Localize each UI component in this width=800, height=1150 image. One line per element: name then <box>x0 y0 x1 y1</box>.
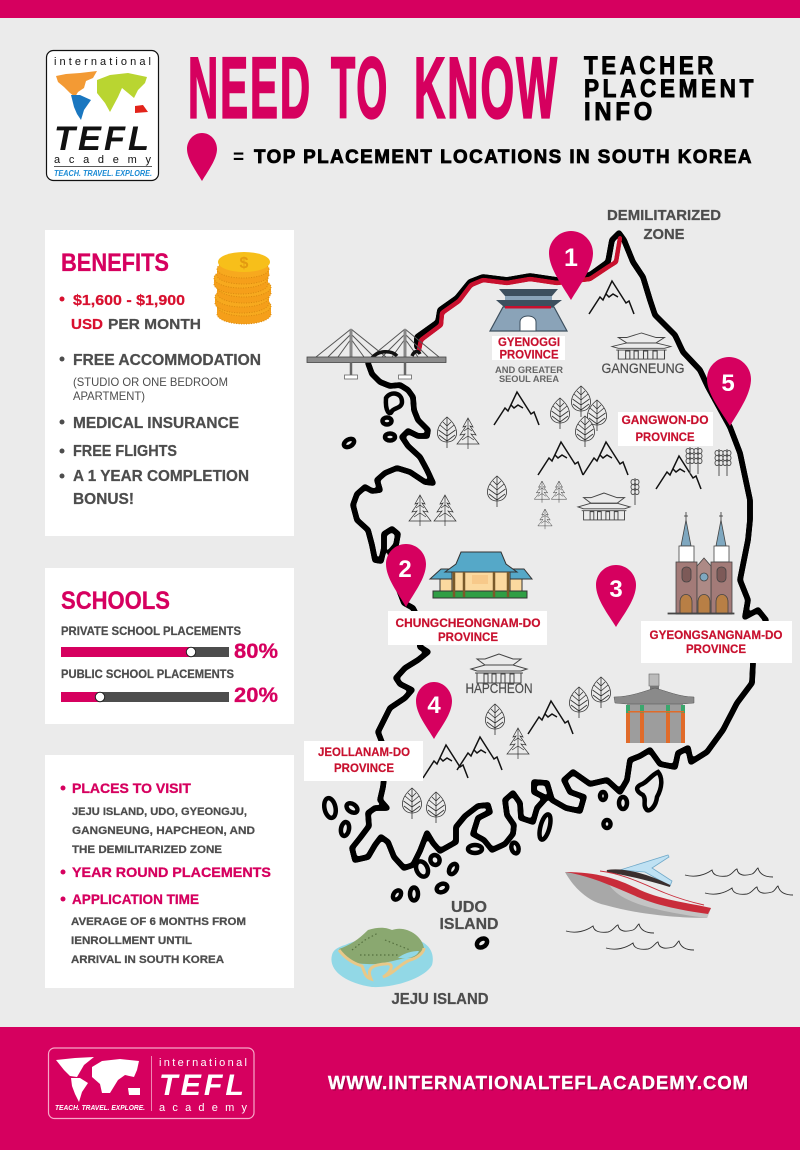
panel: schools <box>45 568 294 724</box>
footer logo <box>48 1048 254 1118</box>
pin 4 <box>416 682 452 739</box>
label: demilitarized zone: ZONE <box>644 226 684 243</box>
places to visit: GANGNEUNG, HAPCHEON, AND <box>72 825 255 837</box>
list: benefits: APARTMENT) <box>73 389 145 403</box>
label: chungcheongnam-do province: CHUNGCHEONGNAM-DO <box>396 616 540 630</box>
label: and greater seoul area: AND GREATER <box>495 365 563 376</box>
pin 3 <box>596 565 636 627</box>
label: demilitarized zone: DEMILITARIZED <box>607 207 721 224</box>
label: gyeonggi province <box>492 335 565 362</box>
subtitle: PLACEMENT <box>584 75 757 103</box>
pin 2: 2 <box>398 556 412 583</box>
list: benefits: BONUS! <box>73 491 134 508</box>
application time: AVERAGE OF 6 MONTHS FROM <box>71 916 246 928</box>
islands <box>323 393 661 949</box>
bar: public school placements <box>61 667 278 707</box>
mountain <box>528 701 573 734</box>
border highlight: demilitarized zone <box>419 238 620 350</box>
title <box>188 40 559 136</box>
icon: hapcheon temple <box>471 654 527 683</box>
icon: gangneung temple <box>612 333 671 359</box>
label: chungcheongnam-do province: PROVINCE <box>438 630 498 644</box>
legend text: = <box>233 147 244 168</box>
footer logo: TEFL <box>159 1069 247 1102</box>
logo: International TEFL Academy: international <box>54 56 151 68</box>
label: jeollanam-do province: JEOLLANAM-DO <box>318 745 410 759</box>
pin 1 <box>549 231 593 300</box>
icon: seoul gate <box>490 289 567 331</box>
logo: International TEFL Academy: academy <box>54 154 152 166</box>
icon: coin stack <box>214 252 271 324</box>
heading: schools: SCHOOLS <box>61 587 170 615</box>
bar: public school placements: PUBLIC SCHOOL PLACEMENTS <box>61 667 234 681</box>
top bar <box>0 0 800 18</box>
list: benefits: $1,600 - $1,900 <box>73 292 185 309</box>
label: gyeongsangnam-do province: GYEONGSANGNAM-DO <box>650 628 782 642</box>
places to visit: THE DEMILITARIZED ZONE <box>72 844 222 856</box>
pine trees <box>409 418 567 759</box>
application time: APPLICATION TIME <box>72 891 199 907</box>
label: gangwon-do province: GANGWON-DO <box>622 413 708 427</box>
legend text: TOP PLACEMENT LOCATIONS IN SOUTH KOREA <box>254 146 753 168</box>
title: KNOW <box>414 40 559 136</box>
title: TO <box>331 40 389 136</box>
subtitle: TEACHER <box>584 52 717 80</box>
application time: ARRIVAL IN SOUTH KOREA <box>71 954 224 966</box>
bar: private school placements <box>61 624 278 663</box>
label: gyeonggi province: GYENOGGI <box>498 335 560 349</box>
label: udo island: UDO <box>451 899 487 916</box>
title: NEED <box>188 40 312 136</box>
label: demilitarized zone <box>607 207 721 243</box>
bar: private school placements: PRIVATE SCHOOL PLACEMENTS <box>61 624 241 638</box>
label: gangneung: GANGNEUNG <box>602 361 684 376</box>
list: benefits: FREE FLIGHTS <box>73 443 177 460</box>
label: udo island: ISLAND <box>440 916 498 933</box>
pin 2 <box>386 544 426 607</box>
label: gyeongsangnam-do province <box>641 621 792 663</box>
label: gyeonggi province: PROVINCE <box>500 348 558 362</box>
places to visit: PLACES TO VISIT <box>72 780 191 796</box>
list: benefits: PER MONTH <box>108 316 201 333</box>
label: udo island <box>440 899 498 933</box>
footer band <box>0 1027 800 1150</box>
application time <box>60 891 246 966</box>
list: benefits <box>60 292 261 508</box>
footer url: WWW.INTERNATIONALTEFLACADEMY.COM <box>330 1074 750 1094</box>
pin 5: 5 <box>721 370 735 397</box>
icon: gray temple <box>614 674 694 743</box>
logo: International TEFL Academy: TEFL <box>54 120 152 158</box>
icon: speedboat <box>565 855 711 918</box>
year round placements: YEAR ROUND PLACEMENTS <box>72 864 271 880</box>
label: jeollanam-do province: PROVINCE <box>334 761 394 775</box>
mountain <box>656 456 701 489</box>
subtitle: INFO <box>584 98 656 126</box>
wheat <box>631 447 731 505</box>
mountain range <box>538 442 628 475</box>
panel: places and timing <box>45 755 294 988</box>
label: jeollanam-do province <box>304 741 423 781</box>
icon: coin stack: $ <box>240 255 249 272</box>
mountain <box>589 281 634 314</box>
icon: blue roof temple <box>430 552 532 598</box>
mountain <box>423 745 468 778</box>
label: jeju island: JEJU ISLAND <box>392 991 488 1008</box>
mountain <box>494 392 539 425</box>
pin 5 <box>707 357 751 426</box>
mountain <box>457 737 502 770</box>
label: gangwon-do province: PROVINCE <box>636 430 694 444</box>
legend pin <box>187 133 217 181</box>
footer logo: TEACH. TRAVEL. EXPLORE. <box>55 1105 145 1112</box>
subtitle <box>584 52 757 126</box>
waves <box>566 868 793 950</box>
pin 1: 1 <box>564 244 578 272</box>
label: chungcheongnam-do province <box>388 611 547 645</box>
list: benefits: USD <box>71 316 103 333</box>
footer logo: international <box>159 1057 247 1069</box>
logo: International TEFL Academy <box>46 50 158 180</box>
places to visit <box>60 780 255 856</box>
bar: private school placements: 80% <box>234 640 278 663</box>
label: gangwon-do province <box>618 412 713 446</box>
heading: benefits: BENEFITS <box>61 249 169 277</box>
logo: International TEFL Academy: TEACH. TRAVEL. EXPLORE. <box>54 169 152 178</box>
list: benefits: A 1 YEAR COMPLETION <box>73 468 249 485</box>
label: and greater seoul area <box>495 365 563 385</box>
bar: public school placements: 20% <box>234 684 278 707</box>
list: benefits: FREE ACCOMMODATION <box>73 352 261 369</box>
places to visit: JEJU ISLAND, UDO, GYEONGJU, <box>72 806 247 818</box>
icon: small temple <box>578 493 630 520</box>
footer logo: academy <box>159 1102 248 1114</box>
application time: IENROLLMENT UNTIL <box>71 935 192 947</box>
list: benefits: MEDICAL INSURANCE <box>73 415 239 432</box>
map: south korea coastline <box>323 233 766 949</box>
panel: benefits <box>45 230 294 536</box>
pin 4: 4 <box>427 692 441 719</box>
label: and greater seoul area: SEOUL AREA <box>499 374 559 385</box>
icon: jeju island <box>331 928 433 987</box>
leaf trees <box>402 386 611 823</box>
label: hapcheon: HAPCHEON <box>466 681 532 696</box>
footer url: WWW.INTERNATIONALTEFLACADEMY.COM <box>328 1073 749 1093</box>
label: gyeongsangnam-do province: PROVINCE <box>686 642 746 656</box>
icon: suspension bridge <box>307 329 446 379</box>
icon: cathedral <box>668 512 734 614</box>
list: benefits: (STUDIO OR ONE BEDROOM <box>73 375 228 389</box>
pin 3: 3 <box>609 576 623 603</box>
